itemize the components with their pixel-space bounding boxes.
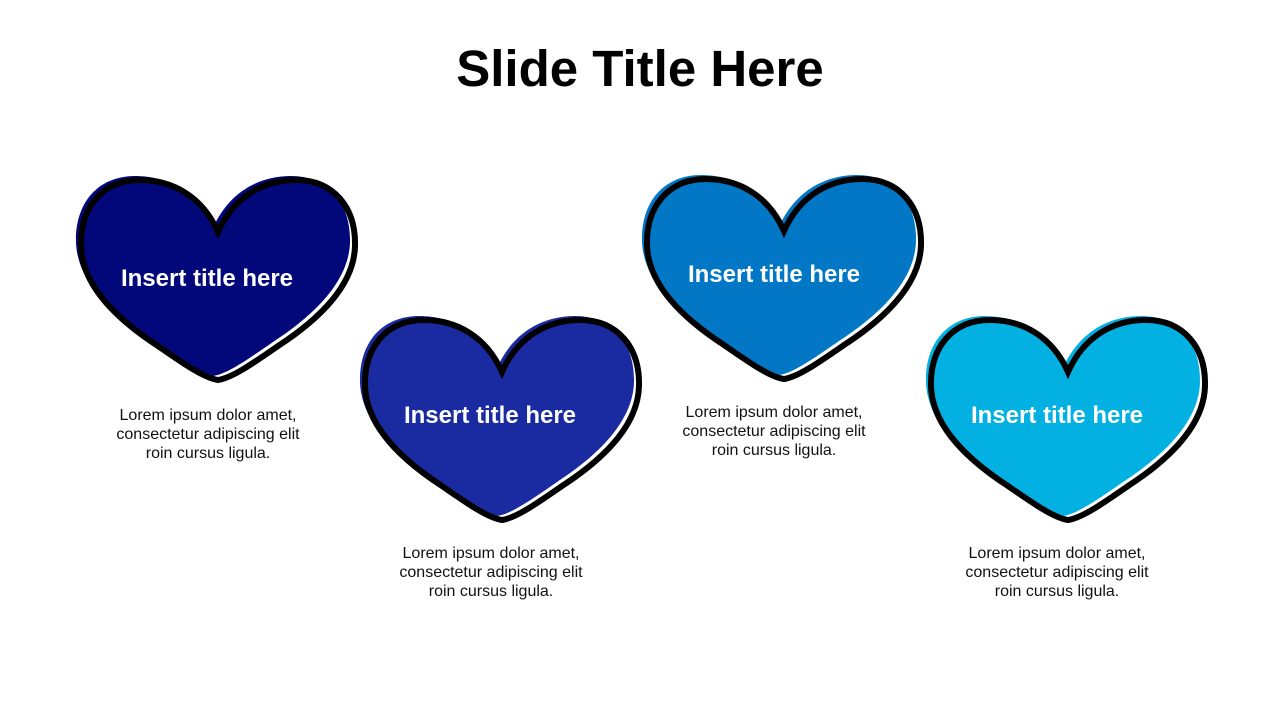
description 1: consectetur adipiscing elit xyxy=(116,426,300,443)
description 2: roin cursus ligula. xyxy=(429,583,553,600)
description 4 xyxy=(965,545,1149,600)
description 4: roin cursus ligula. xyxy=(995,583,1119,600)
description 1 xyxy=(116,407,300,462)
heart 4 xyxy=(926,316,1205,520)
description 2 xyxy=(399,545,583,600)
heart 3 xyxy=(642,175,921,379)
description 3: Lorem ipsum dolor amet, xyxy=(686,404,862,421)
description 3: consectetur adipiscing elit xyxy=(682,423,866,440)
description 2: consectetur adipiscing elit xyxy=(399,564,583,581)
heart 1: Insert title here xyxy=(121,265,293,292)
description 1: Lorem ipsum dolor amet, xyxy=(120,407,296,424)
heart 1 xyxy=(76,176,355,380)
heart 2 xyxy=(360,316,639,520)
description 3 xyxy=(682,404,866,459)
description 2: Lorem ipsum dolor amet, xyxy=(403,545,579,562)
title: Slide Title Here xyxy=(456,40,824,97)
heart 2: Insert title here xyxy=(404,402,576,429)
heart 3: Insert title here xyxy=(688,261,860,288)
description 1: roin cursus ligula. xyxy=(146,445,270,462)
description 4: consectetur adipiscing elit xyxy=(965,564,1149,581)
heart 4: Insert title here xyxy=(971,402,1143,429)
description 3: roin cursus ligula. xyxy=(712,442,836,459)
description 4: Lorem ipsum dolor amet, xyxy=(969,545,1145,562)
